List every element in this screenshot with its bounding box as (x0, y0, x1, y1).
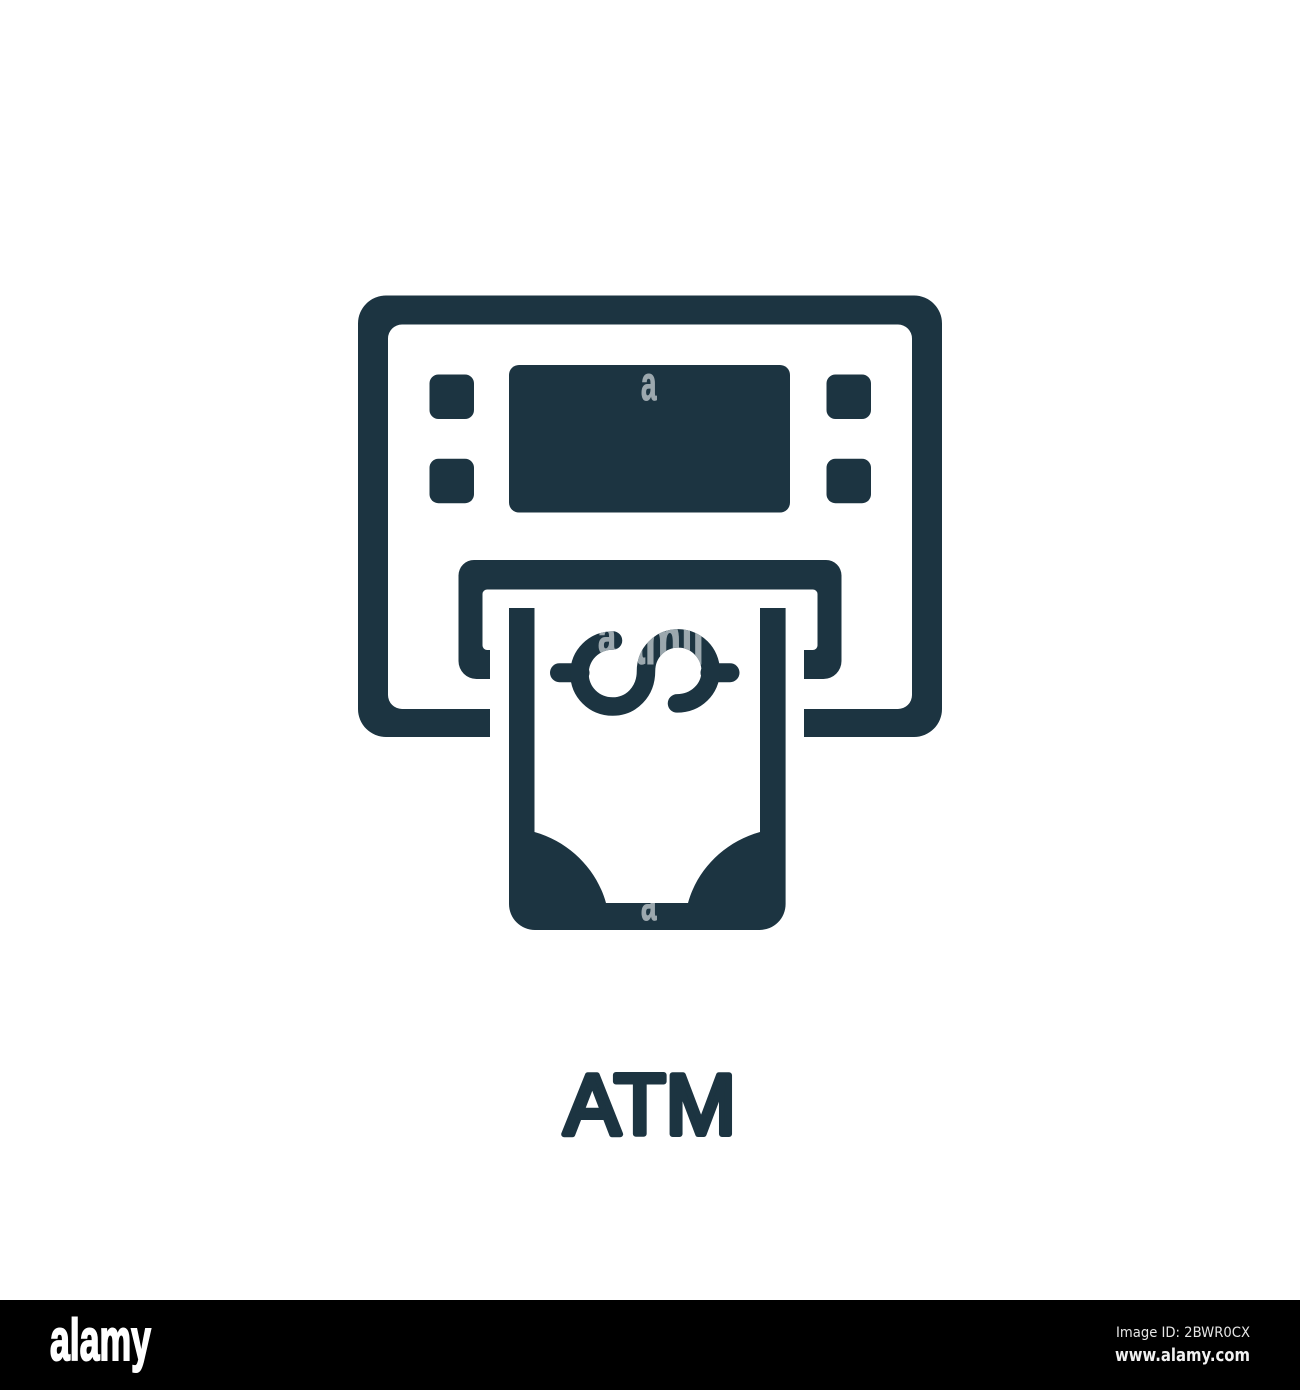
watermark on screen: a (641, 358, 657, 411)
watermark on dollar sign (598, 629, 702, 665)
icon: banknote (509, 608, 786, 930)
screen (509, 365, 790, 512)
cash slot (458, 560, 842, 679)
footer bar (0, 1300, 1300, 1390)
machine body frame (358, 296, 942, 737)
title: ATM: ATM (564, 1058, 736, 1153)
left top button (430, 374, 474, 419)
watermark on banknote base: a (641, 878, 657, 931)
left bottom button (430, 459, 474, 503)
watermark on dollar sign: amil (622, 600, 704, 680)
watermark on dollar sign: a (598, 611, 616, 664)
footer website: www.alamy.com (1115, 1345, 1250, 1366)
right bottom button (826, 459, 871, 503)
right top button (826, 374, 871, 419)
gap behind banknote (490, 640, 804, 740)
icon: dollar sign (560, 638, 730, 706)
icon: ATM machine (358, 296, 942, 737)
footer logo: alamy: alamy (50, 1308, 151, 1373)
footer image id: Image ID: 2BWR0CX (1116, 1325, 1250, 1341)
